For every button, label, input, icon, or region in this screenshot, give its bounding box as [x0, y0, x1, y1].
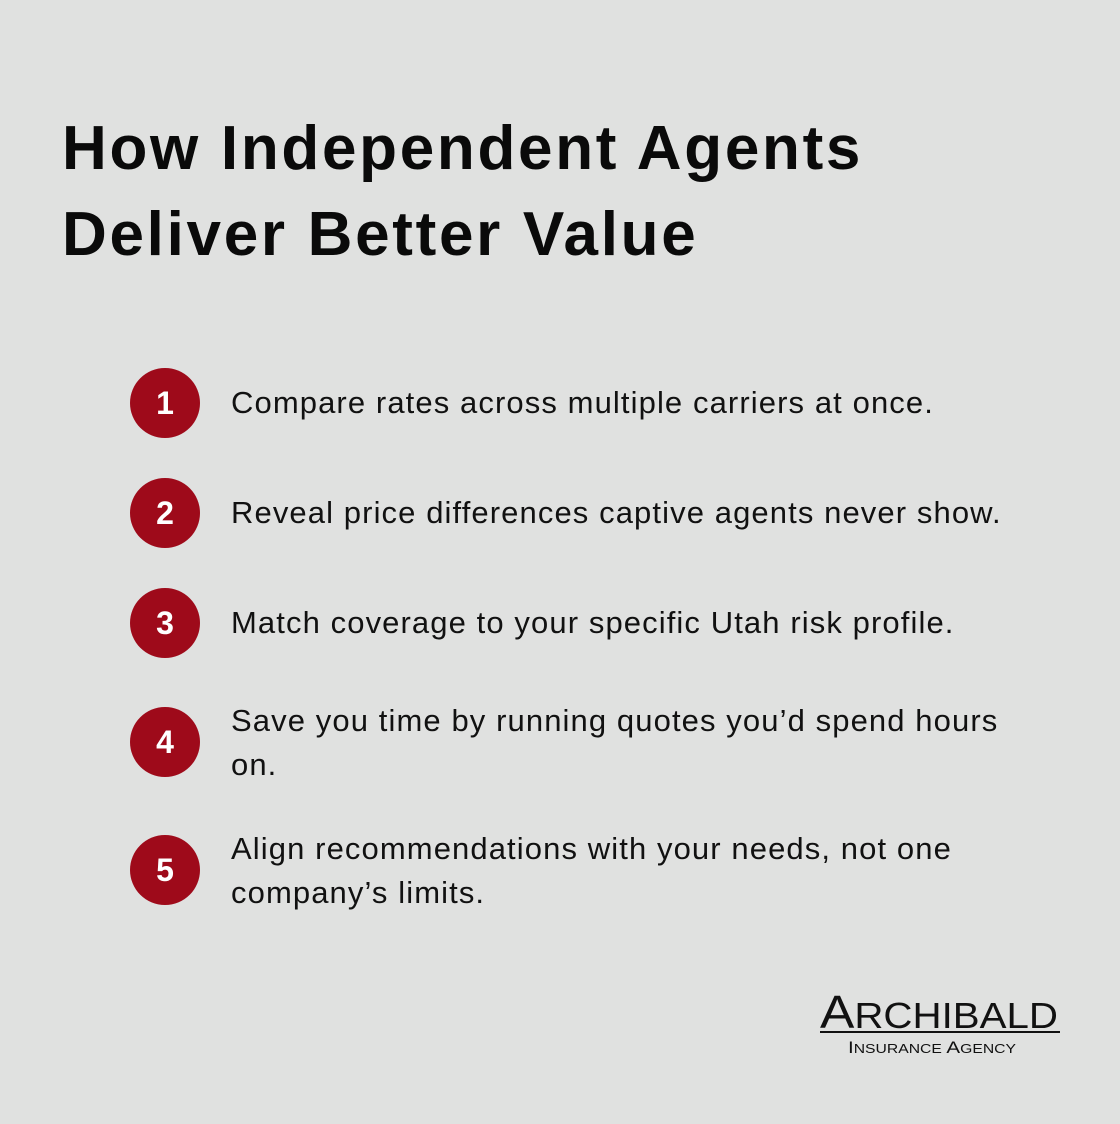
- logo: INSURANCE AGENCY: [848, 1038, 1016, 1057]
- title: [62, 114, 863, 269]
- number badge 2: [130, 478, 200, 548]
- number badge 4: 4: [156, 724, 174, 760]
- item 5: [130, 831, 952, 910]
- item 2: [130, 478, 1002, 548]
- text 1: Compare rates across multiple carriers at once.: [231, 385, 934, 420]
- text 4: Save you time by running quotes you’d spend hours on.: [231, 703, 998, 782]
- item 1: [130, 368, 934, 438]
- item 4: [130, 703, 998, 782]
- logo: [820, 988, 1060, 1057]
- title: How Independent Agents: [62, 114, 863, 183]
- text 3: Match coverage to your specific Utah risk profile.: [231, 605, 954, 640]
- number badge 1: [130, 368, 200, 438]
- number badge 3: 3: [156, 605, 174, 641]
- number badge 1: 1: [156, 385, 174, 421]
- number badge 3: [130, 588, 200, 658]
- number badge 5: [130, 835, 200, 905]
- title: Deliver Better Value: [62, 200, 698, 269]
- number badge 2: 2: [156, 495, 174, 531]
- number badge 4: [130, 707, 200, 777]
- text 5: Align recommendations with your needs, not one company’s limits.: [231, 831, 952, 910]
- text 2: Reveal price differences captive agents never show.: [231, 495, 1002, 530]
- item 3: [130, 588, 954, 658]
- number badge 5: 5: [156, 852, 174, 888]
